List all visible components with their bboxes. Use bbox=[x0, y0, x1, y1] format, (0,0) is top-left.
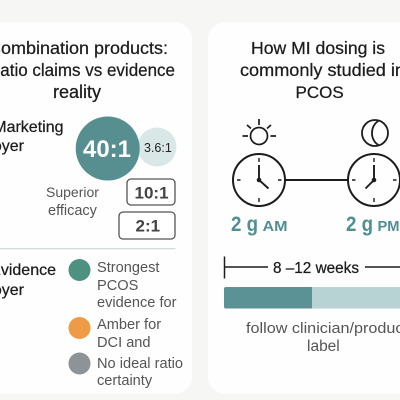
panel: combination products bbox=[0, 22, 192, 394]
note: follow clinician: follow clinician/product bbox=[246, 320, 400, 337]
connector line bbox=[285, 179, 348, 181]
legend: amber for DCI bbox=[68, 317, 161, 351]
label: marketing employer bbox=[0, 119, 64, 155]
dose label: 2 g AM bbox=[231, 213, 288, 236]
badge: 2:1 bbox=[119, 212, 175, 239]
legend: amber for DCI: DCI and bbox=[97, 335, 151, 351]
badge: 10:1 bbox=[127, 179, 175, 205]
circle: 40:1 bbox=[76, 116, 140, 180]
legend: strongest PCOS evidence: PCOS bbox=[97, 278, 139, 294]
title: combination products: reality bbox=[53, 82, 101, 102]
badge: 10:1: 10:1 bbox=[134, 184, 169, 202]
legend: no ideal ratio bbox=[68, 352, 183, 389]
icon: AM clock bbox=[233, 154, 285, 206]
duration marker: 8-12 weeks bbox=[224, 256, 400, 278]
title: MI dosing bbox=[240, 38, 400, 102]
legend: strongest PCOS evidence bbox=[68, 259, 177, 311]
title: MI dosing: How MI dosing is bbox=[251, 38, 385, 58]
badge: 2:1: 2:1 bbox=[136, 216, 160, 236]
dose label: 2 g AM: AM bbox=[262, 218, 288, 235]
text: superior efficacy bbox=[46, 184, 99, 219]
circle: 40:1: 40:1 bbox=[83, 136, 131, 163]
dose label: 2 g PM: 2 g bbox=[346, 213, 373, 236]
icon: PM clock bbox=[348, 154, 400, 206]
legend: strongest PCOS evidence: evidence for bbox=[97, 295, 177, 311]
legend: strongest PCOS evidence: Strongest bbox=[97, 260, 159, 276]
legend: no ideal ratio: No ideal ratio bbox=[97, 356, 183, 372]
title: MI dosing: PCOS bbox=[296, 83, 344, 102]
icon: sun bbox=[242, 119, 276, 144]
progress bar bbox=[224, 287, 400, 308]
note: follow clinician: label bbox=[307, 338, 340, 355]
note: follow clinician bbox=[246, 320, 400, 355]
legend: amber for DCI: Amber for bbox=[97, 317, 161, 333]
dose label: 2 g AM: 2 g bbox=[231, 213, 258, 236]
circle: 3.6:1 bbox=[138, 128, 176, 166]
label: evidence employer bbox=[0, 262, 56, 299]
dose label: 2 g PM: PM bbox=[378, 218, 400, 235]
text: superior efficacy: Superior bbox=[46, 184, 99, 200]
circle: 3.6:1: 3.6:1 bbox=[144, 141, 172, 155]
duration marker: 8-12 weeks: 8 –12 weeks bbox=[273, 260, 359, 277]
title: MI dosing: commonly studied in bbox=[240, 60, 400, 80]
legend: no ideal ratio: certainty bbox=[97, 373, 153, 389]
panel: MI dosing bbox=[208, 22, 400, 394]
icon: moon bbox=[362, 120, 388, 146]
title: combination products bbox=[0, 38, 175, 102]
dose label: 2 g PM bbox=[346, 213, 400, 236]
text: superior efficacy: efficacy bbox=[48, 203, 98, 219]
